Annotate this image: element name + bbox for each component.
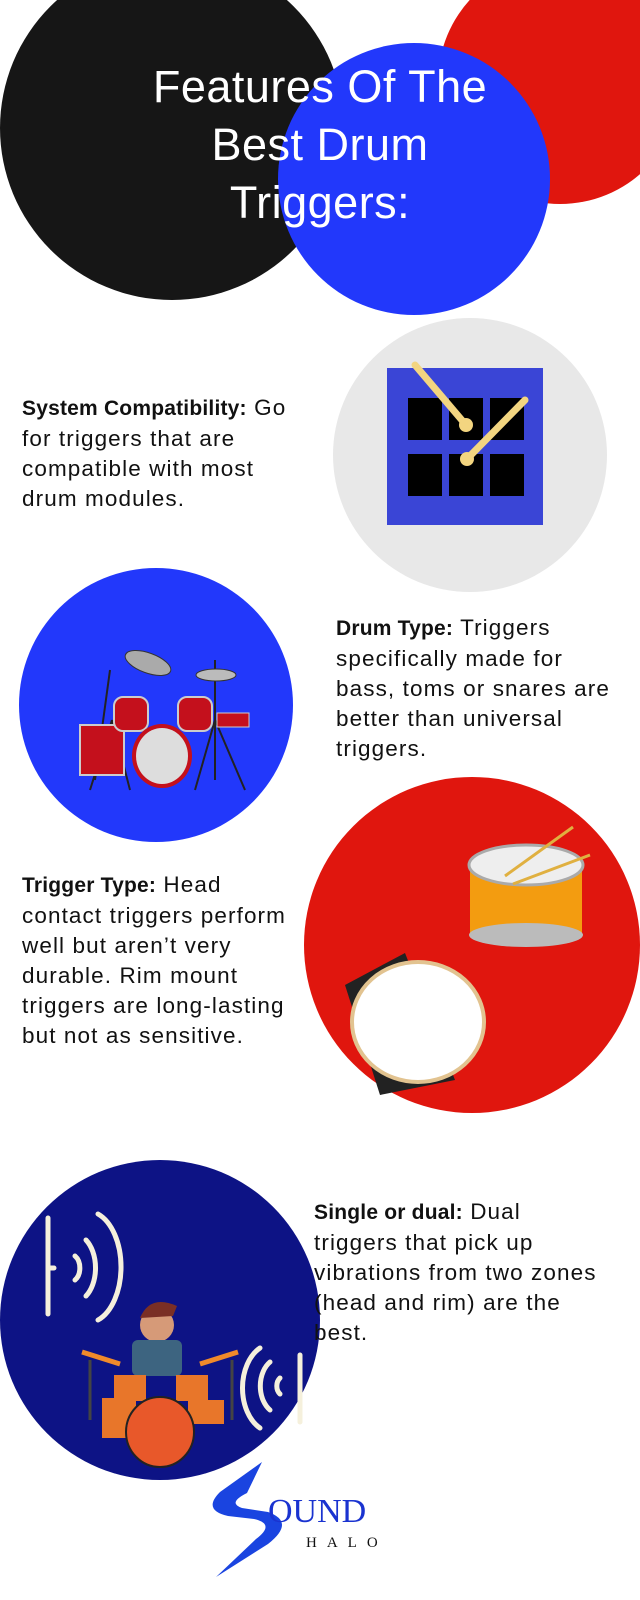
text: trigger type — [22, 872, 286, 1048]
text: drum type — [336, 615, 610, 761]
title: Best Drum — [211, 119, 429, 170]
text: single or dual: best. — [314, 1320, 368, 1345]
title: Triggers: — [230, 177, 410, 228]
text: system compatibility — [22, 395, 286, 511]
text: trigger type: triggers are long-lasting — [22, 993, 285, 1018]
text: single or dual — [314, 1199, 597, 1345]
text: drum type: specifically made for — [336, 646, 563, 671]
title: Features Of The — [153, 61, 487, 112]
text: drum type: Drum Type: Triggers — [336, 615, 551, 640]
header circles — [0, 0, 640, 315]
text: system compatibility: compatible with most — [22, 456, 254, 481]
text: trigger type: Trigger Type: Head — [22, 872, 222, 897]
text: trigger type: contact triggers perform — [22, 903, 286, 928]
text: system compatibility: for triggers that are — [22, 426, 235, 451]
text: system compatibility: System Compatibility: Go — [22, 395, 286, 420]
text: trigger type: well but aren’t very — [22, 933, 232, 958]
text: drum type: better than universal — [336, 706, 563, 731]
text: single or dual: vibrations from two zones — [314, 1260, 597, 1285]
text: drum type: bass, toms or snares are — [336, 676, 610, 701]
text: single or dual: Single or dual: Dual — [314, 1199, 521, 1224]
title — [153, 61, 487, 228]
icon: drum pad grid — [333, 318, 607, 592]
text: trigger type: durable. Rim mount — [22, 963, 238, 988]
icon: drum kit — [19, 568, 293, 842]
icon: snare and bass drum — [304, 777, 640, 1113]
logo: Sound Halo: HALO — [306, 1535, 388, 1551]
logo: Sound Halo: OUND — [268, 1493, 366, 1530]
icon: drummer with vibrations — [0, 1160, 320, 1480]
logo: Sound Halo — [213, 1462, 388, 1577]
text: trigger type: but not as sensitive. — [22, 1023, 244, 1048]
text: single or dual: triggers that pick up — [314, 1230, 533, 1255]
text: drum type: triggers. — [336, 736, 427, 761]
text: system compatibility: drum modules. — [22, 486, 185, 511]
text: single or dual: (head and rim) are the — [314, 1290, 561, 1315]
